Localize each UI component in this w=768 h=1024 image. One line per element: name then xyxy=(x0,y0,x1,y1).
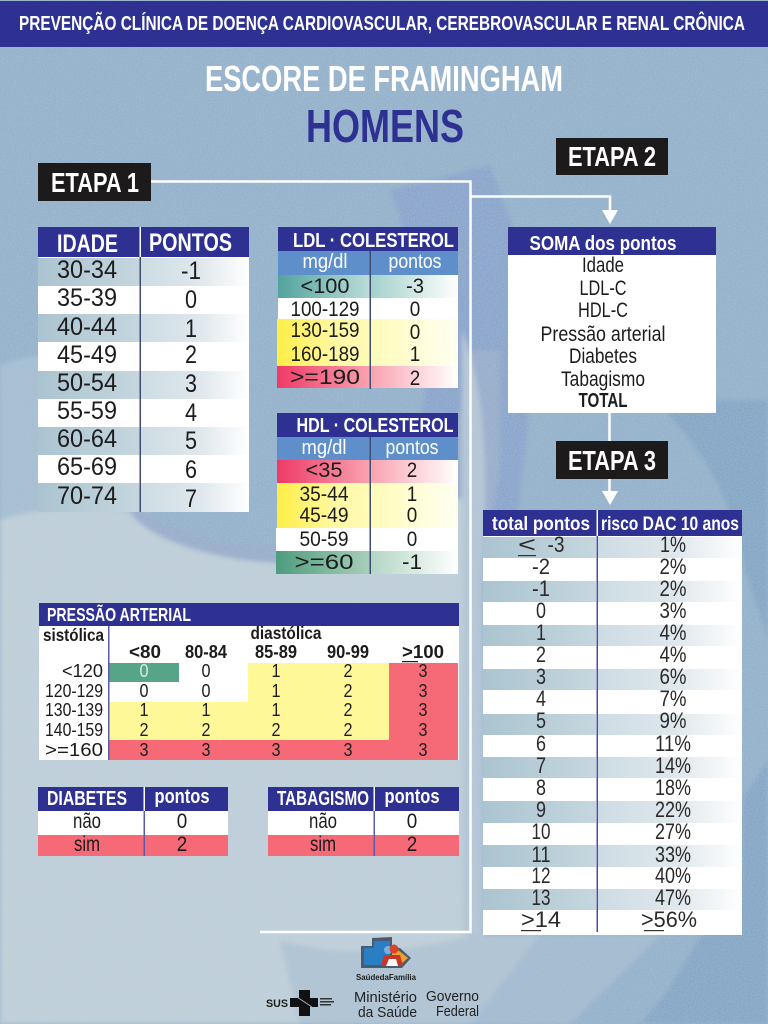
panel: risco dac 10 anos: 2% xyxy=(660,576,686,601)
panel: pressao arterial: 0 xyxy=(202,681,210,701)
panel: pressao arterial: 1 xyxy=(272,700,280,720)
panel: soma dos pontos: Pressão arterial xyxy=(540,322,666,346)
panel: hdl colesterol: 1 xyxy=(407,482,417,506)
panel: risco dac 10 anos: 7% xyxy=(660,686,686,711)
label: etapa 2: ETAPA 2 xyxy=(568,141,656,172)
panel: idade table: 50-54 xyxy=(57,369,117,397)
panel: idade table: 35-39 xyxy=(57,284,117,312)
panel: tabagismo: 2 xyxy=(407,832,417,856)
panel: idade table: PONTOS xyxy=(149,229,232,257)
panel: pressao arterial: sistólica xyxy=(43,625,104,645)
panel: diabetes: DIABETES xyxy=(47,788,127,810)
panel: hdl colesterol: -1 xyxy=(402,550,422,574)
panel: pressao arterial: 2 xyxy=(344,661,352,681)
panel: pressao arterial: 90-99 xyxy=(327,642,369,662)
panel: idade table: 1 xyxy=(185,315,197,343)
panel: hdl colesterol: mg/dl xyxy=(302,437,346,459)
panel: risco dac 10 anos: 18% xyxy=(655,775,691,800)
panel: risco dac 10 anos: risco DAC 10 anos xyxy=(601,514,739,535)
panel: pressao arterial: 0 xyxy=(140,681,148,701)
panel: tabagismo: TABAGISMO xyxy=(277,788,369,810)
panel: diabetes: pontos xyxy=(154,786,210,808)
panel: hdl colesterol: 2 xyxy=(407,458,417,482)
panel: ldl colesterol: 2 xyxy=(410,366,420,390)
logo: saude da familia xyxy=(356,937,417,982)
panel: pressao arterial xyxy=(39,603,459,760)
panel: ldl colesterol: 160-189 xyxy=(290,342,360,366)
panel: hdl colesterol: pontos xyxy=(386,437,438,459)
panel: pressao arterial: 3 xyxy=(418,720,428,740)
panel: pressao arterial: PRESSÃO ARTERIAL xyxy=(47,604,191,625)
panel: diabetes: sim xyxy=(74,832,100,856)
panel: risco dac 10 anos: 11% xyxy=(655,731,691,756)
panel: pressao arterial: 0 xyxy=(140,661,148,681)
panel: risco dac 10 anos: 14% xyxy=(655,753,691,778)
panel: idade table: 4 xyxy=(185,399,197,427)
panel: risco dac 10 anos: total pontos xyxy=(492,514,590,535)
panel: risco dac 10 anos: 1% xyxy=(660,532,686,557)
panel: soma dos pontos: TOTAL xyxy=(578,389,628,412)
panel: pressao arterial: 2 xyxy=(202,720,210,740)
panel: diabetes: não xyxy=(73,809,101,833)
logo: ministerio da saude xyxy=(354,990,417,1021)
panel: risco dac 10 anos: 9% xyxy=(660,708,686,733)
panel: soma dos pontos: Tabagismo xyxy=(561,367,645,391)
panel: ldl colesterol: 100-129 xyxy=(290,297,360,321)
panel: tabagismo: 0 xyxy=(407,809,417,833)
panel: pressao arterial: 3 xyxy=(140,740,148,760)
panel: risco dac 10 anos: 9 xyxy=(536,797,546,822)
logo: sus: SUS xyxy=(266,998,288,1010)
panel: hdl colesterol: <35 xyxy=(306,458,343,482)
panel: idade table: 7 xyxy=(185,485,197,513)
panel: idade table xyxy=(38,227,249,513)
panel: pressao arterial: 3 xyxy=(202,740,210,760)
panel: pressao arterial: 3 xyxy=(418,700,428,720)
panel: risco dac 10 anos: -3 xyxy=(548,532,564,557)
panel: risco dac 10 anos xyxy=(483,510,742,935)
panel: tabagismo: sim xyxy=(310,832,336,856)
panel: risco dac 10 anos: < xyxy=(518,532,536,557)
panel: risco dac 10 anos: 2% xyxy=(660,554,686,579)
panel: idade table: 55-59 xyxy=(57,397,117,425)
panel: tabagismo: não xyxy=(309,809,337,833)
panel: tabagismo: pontos xyxy=(384,786,440,808)
logo: ministerio da saude: Ministério xyxy=(354,990,417,1006)
panel: ldl colesterol: mg/dl xyxy=(302,251,348,273)
panel: risco dac 10 anos: 12 xyxy=(532,863,550,888)
panel: pressao arterial: 2 xyxy=(344,700,352,720)
panel: hdl colesterol: 0 xyxy=(407,503,417,527)
panel: hdl colesterol xyxy=(276,413,458,574)
panel: pressao arterial: >100 xyxy=(402,642,444,662)
panel: risco dac 10 anos: 4% xyxy=(660,642,686,667)
panel: risco dac 10 anos: 8 xyxy=(536,775,546,800)
label: etapa 2 xyxy=(556,138,668,175)
panel: ldl colesterol xyxy=(277,227,458,390)
logo: governo federal xyxy=(426,989,479,1020)
panel: pressao arterial: >=160 xyxy=(45,740,103,760)
panel: soma dos pontos xyxy=(508,227,716,413)
panel: pressao arterial: 80-84 xyxy=(185,642,227,662)
panel: idade table: 0 xyxy=(185,286,197,314)
panel: pressao arterial: 3 xyxy=(272,740,280,760)
panel: pressao arterial: 120-129 xyxy=(45,681,103,701)
panel: risco dac 10 anos: -2 xyxy=(532,554,550,579)
header banner xyxy=(0,1,768,47)
panel: hdl colesterol: 45-49 xyxy=(300,503,348,527)
subtitle: homens: HOMENS xyxy=(306,100,464,152)
panel: risco dac 10 anos: -1 xyxy=(532,576,550,601)
panel: pressao arterial: 85-89 xyxy=(255,642,297,662)
logo: saude da familia: SaúdedaFamília xyxy=(356,973,417,982)
panel: pressao arterial: 3 xyxy=(418,661,428,681)
label: etapa 1: ETAPA 1 xyxy=(51,167,139,198)
panel: idade table: 30-34 xyxy=(57,256,117,284)
panel: ldl colesterol: 130-159 xyxy=(290,318,360,342)
panel: hdl colesterol: 35-44 xyxy=(300,482,349,506)
panel: pressao arterial: 3 xyxy=(344,740,352,760)
logo: ministerio da saude: da Saúde xyxy=(358,1005,417,1021)
panel: pressao arterial: 1 xyxy=(272,661,280,681)
panel: hdl colesterol: 0 xyxy=(407,527,417,551)
panel: ldl colesterol: <100 xyxy=(300,274,350,298)
panel: pressao arterial: <120 xyxy=(62,661,103,681)
panel: risco dac 10 anos: 6 xyxy=(536,731,546,756)
panel: soma dos pontos: LDL-C xyxy=(580,276,626,300)
panel: diabetes: 2 xyxy=(177,832,187,856)
panel: risco dac 10 anos: 22% xyxy=(655,797,691,822)
panel: risco dac 10 anos: 40% xyxy=(655,863,691,888)
panel: risco dac 10 anos: 3 xyxy=(536,664,546,689)
panel: idade table: 2 xyxy=(185,341,197,369)
panel: soma dos pontos: Idade xyxy=(582,253,624,277)
panel: idade table: 5 xyxy=(185,427,197,455)
panel: risco dac 10 anos: 13 xyxy=(532,885,550,910)
panel: idade table: IDADE xyxy=(57,230,118,258)
panel: pressao arterial: 3 xyxy=(418,681,428,701)
panel: risco dac 10 anos: 5 xyxy=(536,708,546,733)
panel: pressao arterial: diastólica xyxy=(250,623,322,643)
panel: pressao arterial: <80 xyxy=(129,642,161,662)
panel: risco dac 10 anos: 1 xyxy=(536,620,546,645)
panel: risco dac 10 anos: >56% xyxy=(641,907,697,932)
panel: risco dac 10 anos: 33% xyxy=(655,842,691,867)
panel: pressao arterial: 1 xyxy=(202,700,210,720)
panel: risco dac 10 anos: 0 xyxy=(536,598,546,623)
panel: ldl colesterol: 0 xyxy=(410,320,420,344)
panel: risco dac 10 anos: 6% xyxy=(660,664,686,689)
panel: soma dos pontos: HDL-C xyxy=(578,298,628,322)
panel: ldl colesterol: pontos xyxy=(388,251,442,273)
panel: pressao arterial: 2 xyxy=(344,720,352,740)
panel: idade table: 65-69 xyxy=(57,453,117,481)
panel: risco dac 10 anos: 4% xyxy=(660,620,686,645)
panel: pressao arterial: 2 xyxy=(140,720,148,740)
label: etapa 1 xyxy=(38,163,151,201)
panel: idade table: 70-74 xyxy=(57,482,117,510)
panel: risco dac 10 anos: 4 xyxy=(536,686,546,711)
panel: idade table: 45-49 xyxy=(57,341,117,369)
connector lines and arrows xyxy=(151,182,618,932)
panel: idade table: 40-44 xyxy=(57,313,117,341)
panel: ldl colesterol: 1 xyxy=(410,342,420,366)
panel: risco dac 10 anos: 10 xyxy=(532,819,550,844)
panel: diabetes: 0 xyxy=(177,809,187,833)
panel: hdl colesterol: >=60 xyxy=(294,550,354,574)
label: etapa 3: ETAPA 3 xyxy=(568,445,656,476)
panel: pressao arterial: 1 xyxy=(272,681,280,701)
panel: pressao arterial: 140-159 xyxy=(45,720,103,740)
panel: ldl colesterol: 0 xyxy=(410,297,420,321)
panel: ldl colesterol: -3 xyxy=(406,274,424,298)
logo: governo federal: Governo xyxy=(426,989,479,1005)
title: ESCORE DE FRAMINGHAM xyxy=(205,58,563,99)
panel: pressao arterial: 2 xyxy=(344,681,352,701)
panel: idade table: 60-64 xyxy=(57,425,117,453)
panel: risco dac 10 anos: 11 xyxy=(532,842,550,867)
panel: pressao arterial: 0 xyxy=(202,661,210,681)
panel: idade table: 6 xyxy=(185,456,197,484)
panel: pressao arterial: 1 xyxy=(140,700,148,720)
panel: risco dac 10 anos: 7 xyxy=(536,753,546,778)
panel: diabetes xyxy=(38,786,228,856)
panel: ldl colesterol: LDL · COLESTEROL xyxy=(293,230,454,252)
panel: pressao arterial: 3 xyxy=(418,740,428,760)
panel: pressao arterial: 130-139 xyxy=(45,700,103,720)
logo: sus xyxy=(266,990,334,1016)
label: etapa 3 xyxy=(556,441,668,479)
panel: idade table: 3 xyxy=(185,370,197,398)
panel: idade table: -1 xyxy=(181,257,201,285)
panel: hdl colesterol: 50-59 xyxy=(300,527,348,551)
panel: risco dac 10 anos: >14 xyxy=(521,907,561,932)
panel: risco dac 10 anos: 3% xyxy=(660,598,686,623)
logo: governo federal: Federal xyxy=(436,1004,479,1020)
panel: pressao arterial: 2 xyxy=(272,720,280,740)
panel: risco dac 10 anos: 47% xyxy=(655,885,691,910)
panel: tabagismo xyxy=(268,786,459,856)
panel: soma dos pontos: Diabetes xyxy=(569,344,637,368)
panel: risco dac 10 anos: 27% xyxy=(655,819,691,844)
panel: soma dos pontos: SOMA dos pontos xyxy=(530,233,676,255)
panel: risco dac 10 anos: 2 xyxy=(536,642,546,667)
panel: hdl colesterol: HDL · COLESTEROL xyxy=(296,415,454,437)
panel: ldl colesterol: >=190 xyxy=(290,365,360,389)
